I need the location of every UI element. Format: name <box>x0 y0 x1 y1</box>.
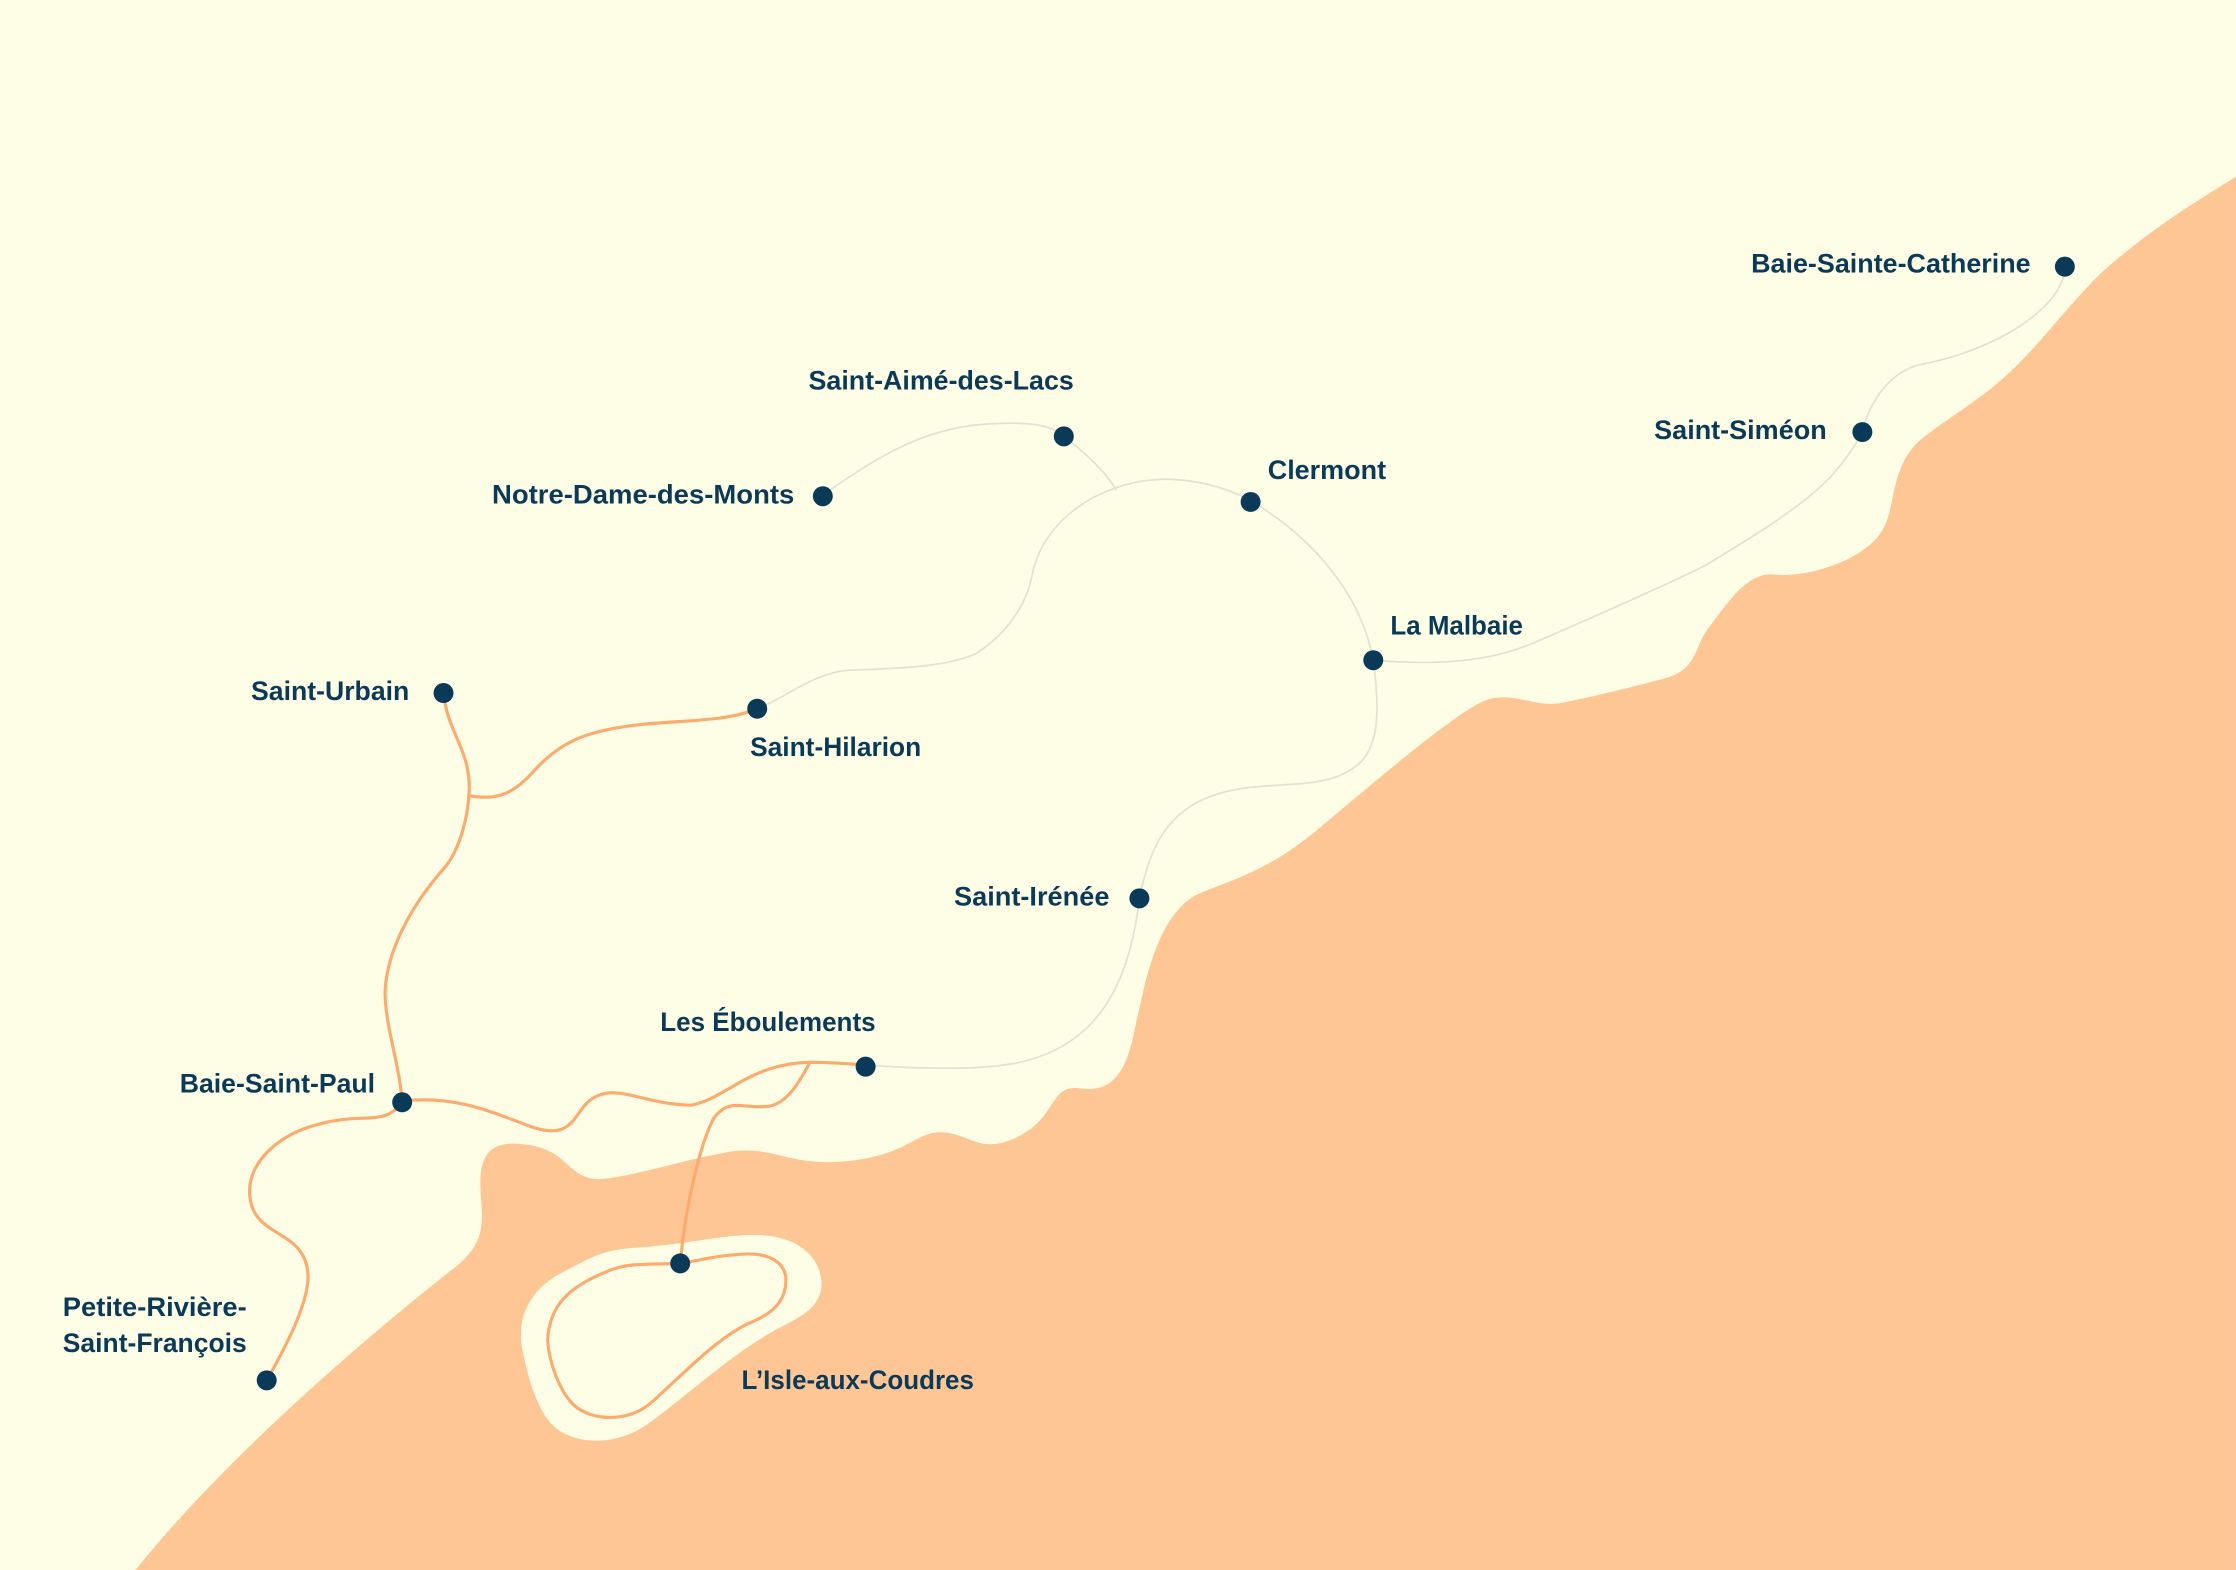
orange road network <box>250 693 866 1417</box>
location: L'Isle-aux-Coudres <box>670 1253 974 1395</box>
location: Saint-Aimé-des-Lacs: Saint-Aimé-des-Lacs <box>809 365 1074 395</box>
location: Petite-Rivière-Saint-François: Saint-François <box>63 1328 247 1358</box>
location: Saint-Hilarion <box>747 699 921 762</box>
location: Saint-Hilarion: Saint-Hilarion <box>750 732 921 762</box>
grey road network <box>757 267 2065 1068</box>
location: Saint-Siméon: Saint-Siméon <box>1654 415 1827 445</box>
location: Les Éboulements <box>660 1007 876 1077</box>
location: Baie-Sainte-Catherine: Baie-Sainte-Catherine <box>1751 248 2031 278</box>
location: Clermont <box>1241 455 1386 512</box>
location: L'Isle-aux-Coudres: L’Isle-aux-Coudres <box>742 1365 974 1395</box>
location: Saint-Irénée: Saint-Irénée <box>954 881 1109 911</box>
island: L'Isle-aux-Coudres <box>521 1235 821 1441</box>
location: Baie-Saint-Paul <box>180 1068 412 1112</box>
location: Saint-Urbain: Saint-Urbain <box>251 676 409 706</box>
location: Baie-Saint-Paul: Baie-Saint-Paul <box>180 1068 375 1098</box>
location: Notre-Dame-des-Monts: Notre-Dame-des-Monts <box>492 479 794 509</box>
location: Les Éboulements: Les Éboulements <box>660 1007 876 1037</box>
location: Petite-Rivière-Saint-François <box>63 1292 277 1390</box>
location: Petite-Rivière-Saint-François: Petite-Rivière- <box>63 1292 247 1322</box>
location: La Malbaie: La Malbaie <box>1390 611 1523 641</box>
location: La Malbaie <box>1363 611 1523 670</box>
location: Clermont: Clermont <box>1268 455 1386 485</box>
location: Saint-Aimé-des-Lacs <box>809 365 1074 446</box>
